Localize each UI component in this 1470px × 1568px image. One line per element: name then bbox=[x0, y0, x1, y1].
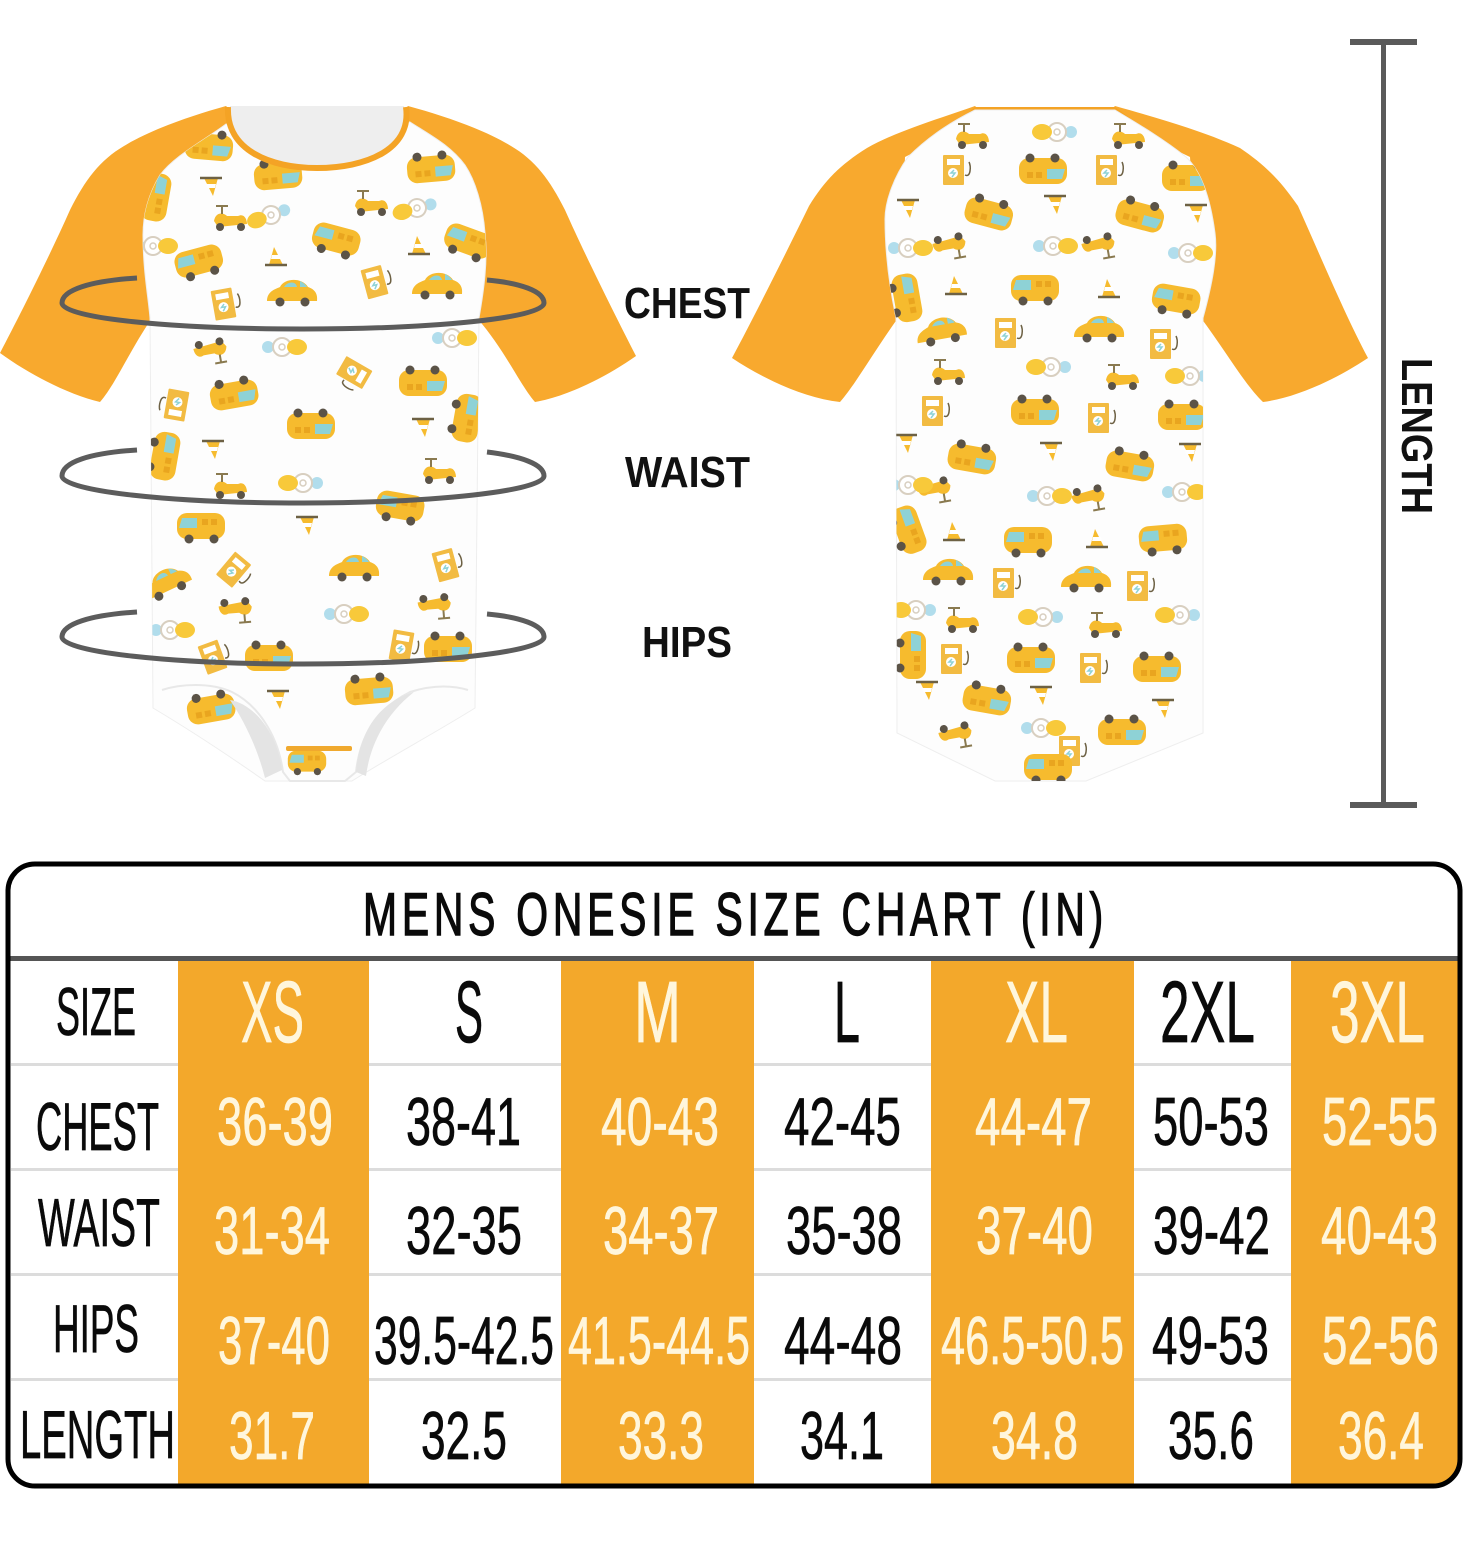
row: waist: 31-34 bbox=[214, 1193, 330, 1269]
left leg opening inner shade bbox=[230, 700, 282, 778]
header row: sizes: SIZE bbox=[56, 974, 136, 1050]
row: chest: 42-45 bbox=[784, 1084, 901, 1160]
back body bbox=[885, 110, 1216, 781]
row: hips: 41.5-44.5 bbox=[568, 1303, 750, 1379]
row: waist: 32-35 bbox=[406, 1193, 522, 1269]
row: chest bbox=[36, 1084, 1438, 1165]
row: hips: HIPS bbox=[53, 1291, 139, 1367]
row: length: 33.3 bbox=[618, 1398, 704, 1474]
row: waist: 34-37 bbox=[603, 1193, 719, 1269]
back collar band bbox=[962, 107, 1130, 118]
row: chest: CHEST bbox=[36, 1089, 159, 1165]
front neck opening bbox=[230, 106, 405, 168]
table outline bbox=[8, 864, 1460, 1486]
back right sleeve bbox=[1105, 106, 1368, 402]
row: hips bbox=[53, 1291, 1439, 1379]
front body bbox=[143, 122, 486, 781]
row: length: 36.4 bbox=[1338, 1398, 1424, 1474]
hips measuring ring bbox=[62, 612, 544, 664]
label: waist: WAIST bbox=[625, 448, 750, 497]
waist measuring ring bbox=[62, 450, 544, 503]
row: waist bbox=[38, 1185, 1438, 1269]
table title: MENS ONESIE SIZE CHART (IN) bbox=[363, 881, 1108, 948]
row: hips: 49-53 bbox=[1152, 1303, 1269, 1379]
row: chest: 50-53 bbox=[1153, 1084, 1269, 1160]
front fabric print bbox=[133, 127, 495, 775]
header row: sizes: L bbox=[834, 964, 860, 1061]
header row: sizes: 2XL bbox=[1160, 964, 1255, 1061]
title divider bbox=[10, 956, 1460, 961]
back left sleeve bbox=[732, 106, 985, 402]
row: length: 34.1 bbox=[800, 1398, 884, 1474]
label: hips: HIPS bbox=[642, 618, 732, 667]
back fabric print bbox=[884, 123, 1213, 784]
row: length bbox=[20, 1397, 1424, 1474]
front leg openings bbox=[162, 685, 468, 781]
row: waist: 39-42 bbox=[1153, 1193, 1270, 1269]
row: length: 31.7 bbox=[229, 1398, 315, 1474]
front left sleeve bbox=[0, 106, 240, 402]
header row: sizes: XS bbox=[241, 964, 304, 1061]
row: chest: 44-47 bbox=[975, 1084, 1092, 1160]
orange column stripes bbox=[178, 961, 1463, 1487]
label: chest: CHEST bbox=[624, 279, 750, 328]
row: hips: 44-48 bbox=[784, 1303, 902, 1379]
row: hips: 39.5-42.5 bbox=[374, 1303, 554, 1379]
row: waist: 35-38 bbox=[786, 1193, 902, 1269]
back view onesie bbox=[732, 106, 1368, 784]
row: chest: 40-43 bbox=[601, 1084, 719, 1160]
header row: sizes: S bbox=[455, 964, 483, 1061]
row: waist: WAIST bbox=[38, 1185, 160, 1261]
header row: sizes bbox=[56, 964, 1425, 1061]
row: length: 35.6 bbox=[1168, 1398, 1254, 1474]
chest measuring ring bbox=[62, 278, 544, 329]
front collar bbox=[228, 107, 407, 168]
row dividers bbox=[11, 1063, 1291, 1381]
row: length: 32.5 bbox=[421, 1398, 507, 1474]
row: chest: 38-41 bbox=[406, 1084, 521, 1160]
row: length: 34.8 bbox=[991, 1398, 1078, 1474]
crotch strip bbox=[286, 746, 352, 751]
row: length: LENGTH bbox=[20, 1397, 175, 1473]
row: hips: 46.5-50.5 bbox=[941, 1303, 1124, 1379]
front right sleeve bbox=[395, 106, 636, 402]
header row: sizes: XL bbox=[1005, 964, 1068, 1061]
header row: sizes: M bbox=[634, 964, 681, 1061]
front view onesie bbox=[0, 106, 636, 781]
label: length: LENGTH bbox=[1392, 358, 1441, 514]
row: hips: 37-40 bbox=[218, 1303, 330, 1379]
length measure bar bbox=[1350, 39, 1417, 808]
size chart table bbox=[8, 864, 1463, 1487]
row: chest: 36-39 bbox=[217, 1084, 333, 1160]
right leg opening inner shade bbox=[356, 692, 414, 776]
row: waist: 37-40 bbox=[976, 1193, 1093, 1269]
